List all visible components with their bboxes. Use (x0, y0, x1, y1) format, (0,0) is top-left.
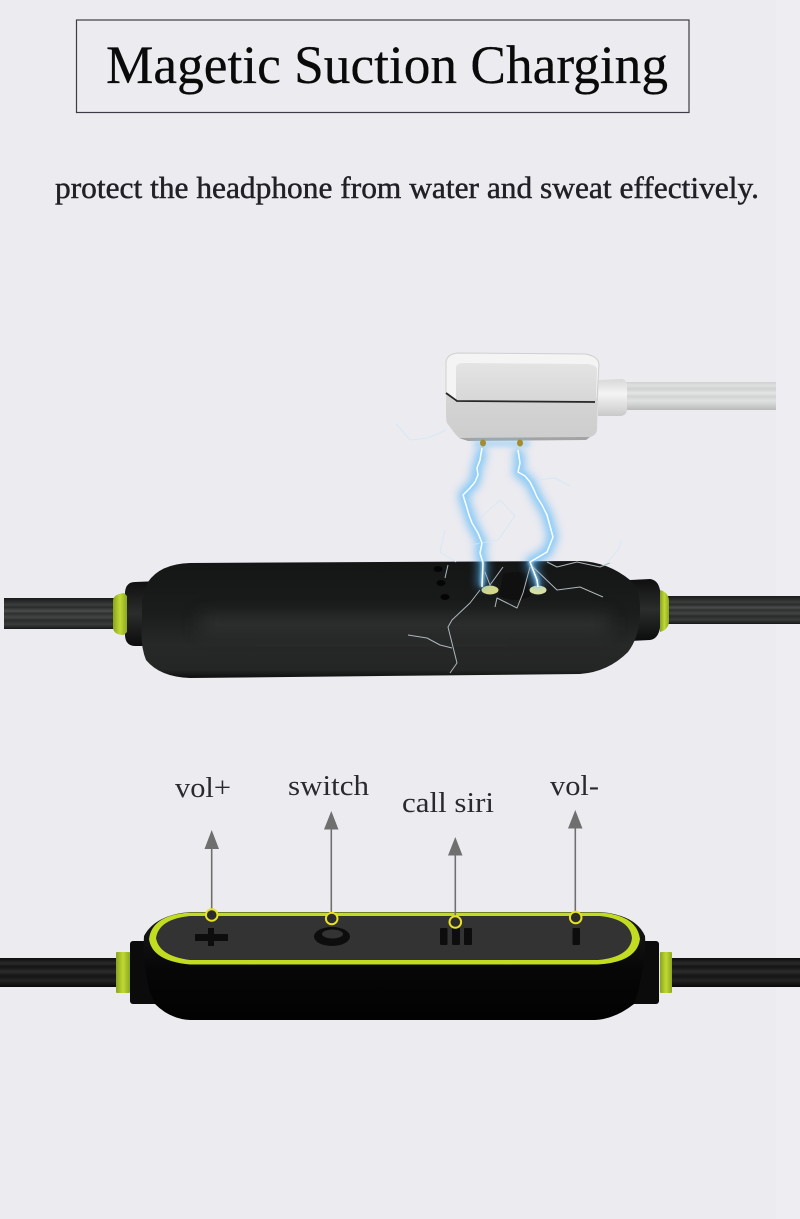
callout: vol-: vol- (550, 770, 599, 802)
right plug (630, 941, 659, 1004)
callout: switch (288, 770, 370, 924)
title box (76, 20, 689, 112)
right ring (660, 952, 672, 993)
right ring (660, 590, 669, 632)
faint side arcs (396, 424, 622, 565)
left cable (0, 958, 118, 987)
top face (156, 916, 632, 960)
callout: vol+ (175, 772, 231, 921)
callout: vol+: vol+ (175, 772, 231, 804)
charger seam (446, 393, 595, 402)
cracks over body (408, 562, 610, 673)
charger body (446, 353, 599, 440)
charger underside shade (459, 437, 590, 441)
speaker holes (434, 566, 450, 600)
blue arcs (463, 448, 553, 587)
right plug (630, 579, 660, 641)
gold pins (480, 440, 486, 446)
pin glow (474, 441, 530, 446)
body (142, 561, 640, 678)
white cable (625, 382, 776, 410)
left ring (116, 952, 130, 993)
left plug (130, 941, 160, 1004)
callout: call siri: call siri (402, 787, 494, 819)
charger neck (598, 379, 627, 416)
blue glow (463, 448, 553, 587)
left plug (125, 581, 160, 646)
plus icon (195, 928, 228, 946)
left cable (4, 598, 116, 629)
callout: call siri (402, 787, 494, 928)
body highlight (200, 616, 610, 632)
callout: vol- (550, 770, 599, 923)
white arc core (463, 448, 553, 587)
charger module with white cable (446, 353, 776, 446)
magnetic socket (499, 572, 531, 600)
circle icon (314, 927, 350, 946)
lightning arcs (396, 424, 622, 673)
charger upper face (456, 363, 597, 401)
minus icon (572, 928, 580, 945)
lower inline control (0, 912, 800, 1020)
title: Magetic Suction Charging (106, 35, 668, 95)
body (144, 912, 645, 1020)
contact pads (482, 586, 498, 594)
three bars icon (440, 928, 472, 945)
callout: switch: switch (288, 770, 370, 802)
subtitle text: protect the headphone from water and sweat effectively. (55, 170, 759, 205)
upper inline control (4, 561, 800, 678)
right cable (666, 596, 800, 624)
right cable (670, 958, 800, 987)
left ring (113, 593, 127, 635)
green rim (149, 912, 640, 964)
charger bevel (446, 353, 599, 402)
